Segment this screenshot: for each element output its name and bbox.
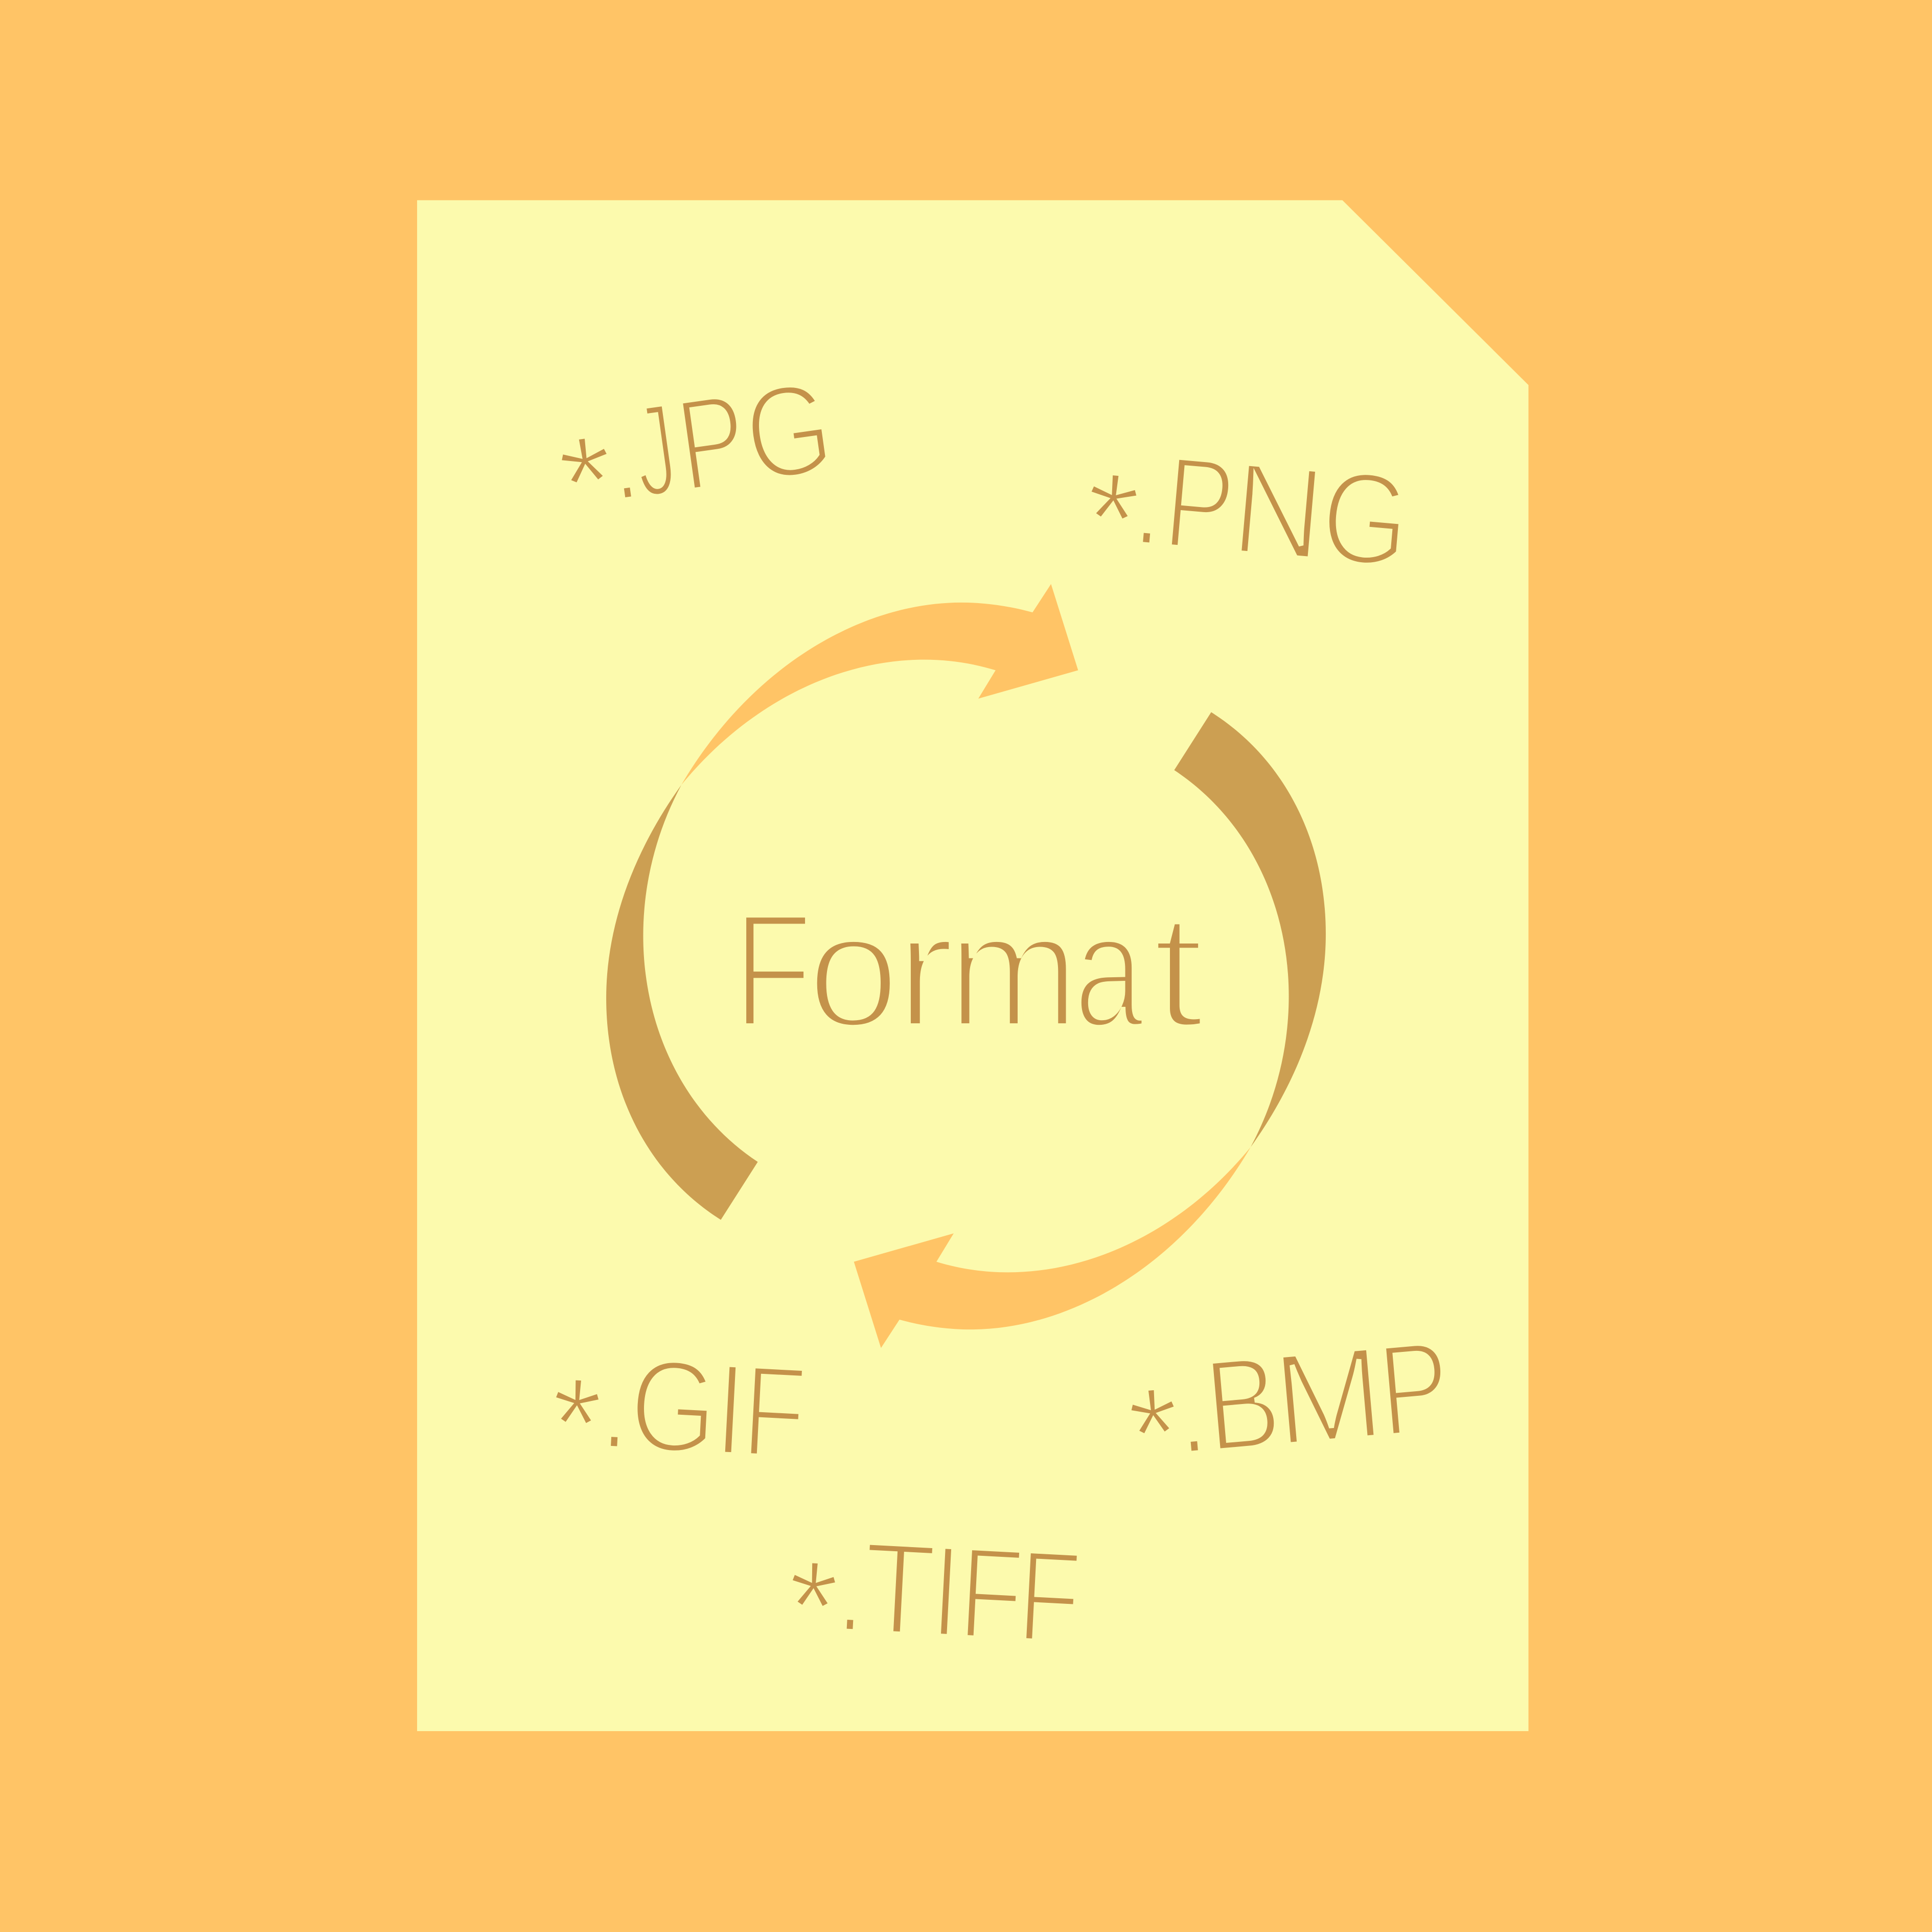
- file extension: JPG: P: [669, 365, 755, 519]
- center label: Format: a: [1074, 880, 1145, 1061]
- center label: Format: t: [1152, 880, 1205, 1061]
- file extension: JPG: .: [598, 381, 647, 529]
- file extension: JPG: J: [625, 376, 685, 525]
- arc: right dark cycle band: [1174, 712, 1326, 1147]
- file extension: PNG: N: [1226, 435, 1330, 588]
- arc: left dark cycle band: [606, 785, 758, 1220]
- file extension: TIFF: .: [834, 1513, 870, 1660]
- file extension: BMP: M: [1268, 1319, 1390, 1474]
- file extension: TIFF: *: [784, 1533, 842, 1681]
- center label: Format: F: [733, 880, 813, 1061]
- document page with cut corner: [417, 200, 1528, 1731]
- file extension: PNG: G: [1316, 443, 1415, 595]
- file extension: BMP: .: [1169, 1335, 1213, 1482]
- file extension: JPG: *: [551, 406, 625, 558]
- file extension: PNG: P: [1159, 429, 1240, 580]
- center label: Format: m: [948, 880, 1079, 1061]
- file extension: BMP: B: [1199, 1328, 1286, 1480]
- center label: Format: r: [895, 880, 955, 1061]
- arrow: bottom light cycle arrow: [854, 1147, 1251, 1348]
- center label: Format: o: [807, 880, 900, 1061]
- file extension: TIFF: F: [956, 1520, 1027, 1668]
- file extension: TIFF: F: [1015, 1523, 1085, 1671]
- arrow: top light cycle arrow: [681, 584, 1078, 785]
- file extension: PNG: *: [1078, 444, 1145, 594]
- file extension: GIF: F: [739, 1338, 810, 1486]
- file extension: PNG: .: [1128, 426, 1171, 574]
- file extension: GIF: .: [597, 1330, 635, 1477]
- file extension: JPG: G: [736, 354, 841, 510]
- file extension: BMP: *: [1123, 1359, 1186, 1509]
- file extension: TIFF: I: [928, 1518, 964, 1665]
- file extension: GIF: G: [626, 1332, 721, 1482]
- file extension: GIF: I: [711, 1336, 749, 1483]
- file extension: GIF: *: [547, 1350, 605, 1498]
- file extension: BMP: P: [1373, 1313, 1456, 1464]
- file extension: TIFF: T: [859, 1514, 939, 1664]
